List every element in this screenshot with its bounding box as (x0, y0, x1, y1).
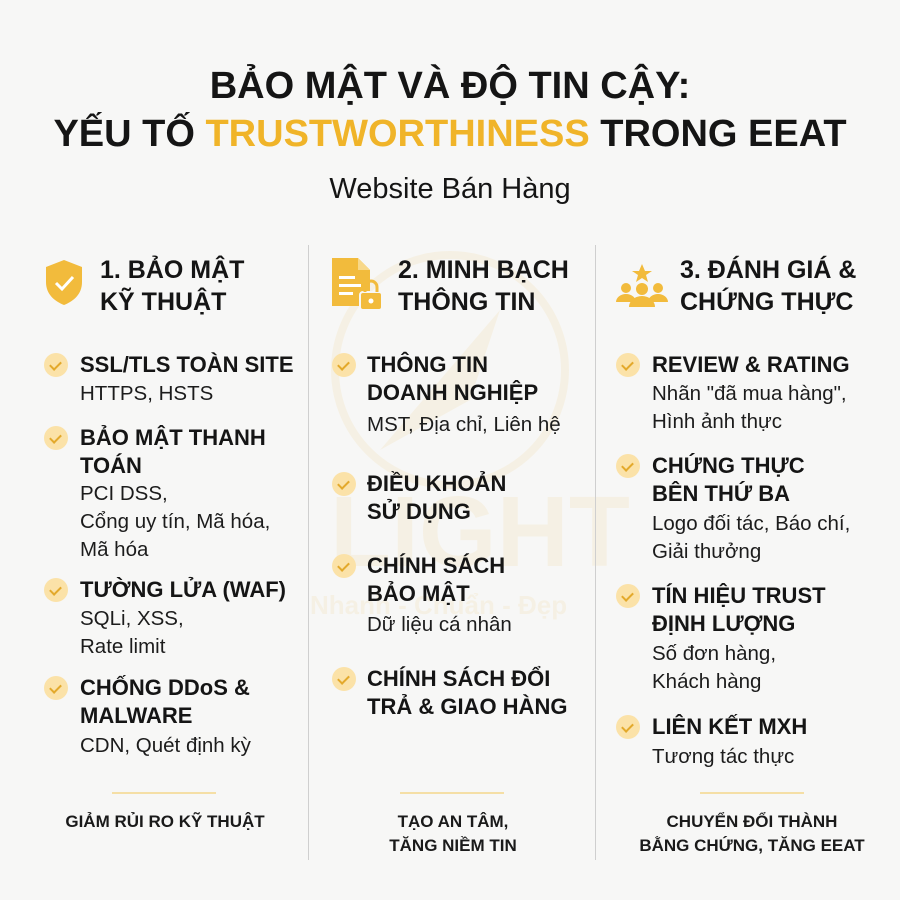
heading: THÔNG TIN (398, 288, 536, 316)
icon: shield (46, 260, 82, 305)
panel: col2: TRẢ & GIAO HÀNG (367, 694, 567, 719)
footer: BẰNG CHỨNG, TĂNG EEAT (639, 836, 865, 855)
heading: CHỨNG THỰC (680, 288, 853, 316)
footer: TẠO AN TÂM, (398, 812, 508, 831)
panel: col1: HTTPS, HSTS (80, 382, 213, 405)
panel: col3: TÍN HIỆU TRUST (652, 583, 826, 608)
panel: col1: TƯỜNG LỬA (WAF) (80, 577, 286, 602)
title (53, 64, 847, 155)
title: BẢO MẬT VÀ ĐỘ TIN CẬY: (210, 65, 690, 107)
panel: col2: DOANH NGHIỆP (367, 380, 538, 405)
panel: col1: Rate limit (80, 635, 165, 658)
footer: CHUYỂN ĐỔI THÀNH (667, 812, 837, 831)
panel: col3: Khách hàng (652, 670, 761, 693)
panel: col3: CHỨNG THỰC (652, 453, 805, 478)
panel: col1: SQLi, XSS, (80, 607, 184, 630)
heading: 2. MINH BẠCH (398, 256, 569, 284)
panel: col2: SỬ DỤNG (367, 499, 471, 524)
panel: col2: THÔNG TIN (367, 352, 488, 377)
panel: col1: TOÁN (80, 453, 142, 478)
panel: col3: BÊN THỨ BA (652, 481, 790, 506)
panel: col3: ĐỊNH LƯỢNG (652, 611, 795, 636)
panel: col2: Dữ liệu cá nhân (367, 613, 512, 636)
subtitle: Website Bán Hàng (329, 173, 571, 205)
footer: TĂNG NIỀM TIN (389, 836, 517, 855)
panel: col1: CDN, Quét định kỳ (80, 734, 251, 757)
panel: col3: Hình ảnh thực (652, 410, 782, 433)
heading (398, 256, 569, 316)
panel: col1: SSL/TLS TOÀN SITE (80, 352, 294, 377)
footer (389, 812, 517, 855)
panel: col1: Cổng uy tín, Mã hóa, (80, 510, 270, 533)
panel: col3: Logo đối tác, Báo chí, (652, 512, 850, 535)
panel: col1 (44, 256, 294, 831)
icon: document lock (332, 258, 381, 309)
panel: col2: BẢO MẬT (367, 581, 470, 606)
watermark logo (310, 251, 630, 620)
title: YẾU TỐ TRUSTWORTHINESS TRONG EEAT (53, 113, 847, 155)
panel: col3 (616, 256, 865, 855)
heading (100, 256, 244, 316)
panel: col2: ĐIỀU KHOẢN (367, 471, 506, 496)
panel: col3: Số đơn hàng, (652, 642, 776, 665)
panel: col2: MST, Địa chỉ, Liên hệ (367, 413, 561, 436)
panel: col3: Nhãn "đã mua hàng", (652, 382, 847, 405)
panel: col1: Mã hóa (80, 538, 148, 561)
panel: col2 (332, 256, 569, 855)
heading: KỸ THUẬT (100, 288, 226, 316)
panel: col1: MALWARE (80, 703, 192, 728)
panel: col1: BẢO MẬT THANH (80, 425, 266, 450)
watermark logo: Nhanh - Chuẩn - Đẹp (310, 590, 567, 620)
icon: people star (616, 264, 668, 307)
panel: col2: CHÍNH SÁCH ĐỔI (367, 666, 550, 691)
panel: col3: Tương tác thực (652, 745, 794, 768)
panel: col3: LIÊN KẾT MXH (652, 714, 807, 739)
panel: col2: CHÍNH SÁCH (367, 553, 505, 578)
heading: 3. ĐÁNH GIÁ & (680, 256, 856, 284)
footer (639, 812, 865, 855)
panel: col3: REVIEW & RATING (652, 352, 850, 377)
heading (680, 256, 856, 316)
watermark logo: LIGHT (330, 476, 630, 588)
heading: 1. BẢO MẬT (100, 256, 244, 284)
panel: col1: PCI DSS, (80, 482, 168, 505)
panel: col3: Giải thưởng (652, 540, 761, 563)
footer: GIẢM RỦI RO KỸ THUẬT (65, 812, 265, 831)
panel: col1: CHỐNG DDoS & (80, 675, 250, 700)
